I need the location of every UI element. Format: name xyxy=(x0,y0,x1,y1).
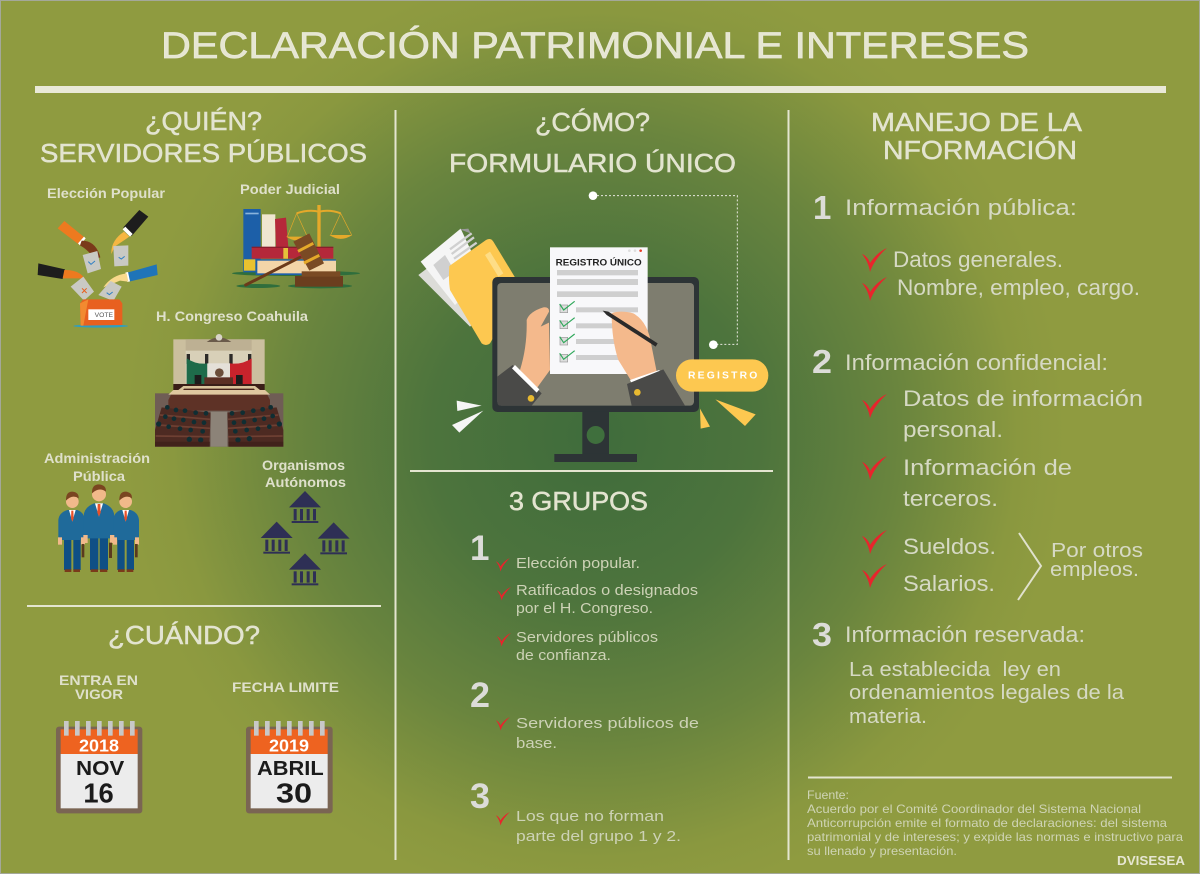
panel: cuándo xyxy=(56,620,339,813)
icon: hands voting xyxy=(38,210,158,328)
panel: manejo de la información xyxy=(807,107,1185,868)
panel: 3 grupos xyxy=(470,486,699,845)
label: entra en vigor: VIGOR xyxy=(75,686,123,702)
section 2: información confidencial: Salarios. xyxy=(903,571,995,596)
group 3: 3 xyxy=(470,777,490,816)
heading: cómo: FORMULARIO ÚNICO xyxy=(449,148,736,178)
heading: cómo xyxy=(449,107,736,178)
illustration: online registration on monitor xyxy=(418,191,768,462)
group 1 xyxy=(470,529,698,664)
group 1: Ratificados o designados xyxy=(516,582,698,599)
section 3: información reservada: materia. xyxy=(849,706,927,728)
label: entra en vigor xyxy=(59,672,138,702)
icon: calendar 2018 nov 16: 16 xyxy=(83,778,114,809)
heading: 3 grupos: 3 GRUPOS xyxy=(509,486,648,516)
section 1: información pública: Nombre, empleo, cargo. xyxy=(897,275,1140,300)
section 1: información pública: Información pública: xyxy=(845,195,1077,220)
credit: dvisesea: DVISESEA xyxy=(1117,854,1185,868)
group 2: base. xyxy=(516,735,557,752)
section 1: información pública xyxy=(813,189,1140,301)
icon: calendar 2018 nov 16: 2018 xyxy=(79,735,119,755)
icon: calendar 2019 abril 30: ABRIL xyxy=(257,757,324,780)
label: organismos autónomos xyxy=(262,457,346,490)
group 3: Los que no forman xyxy=(516,808,664,825)
group 1: 1 xyxy=(470,529,489,568)
source note: Anticorrupción emite el formato de declaraciones: del sistema xyxy=(807,816,1167,830)
section 2: información confidencial: terceros. xyxy=(903,486,998,511)
heading: manejo xyxy=(871,107,1083,165)
label: organismos autónomos: Autónomos xyxy=(265,474,346,490)
title: DECLARACIÓN PATRIMONIAL E INTERESES xyxy=(161,24,1029,66)
section 3: información reservada: La establecida ley en xyxy=(849,659,1061,681)
icon: hands voting: VOTE xyxy=(95,312,114,319)
illustration: online registration on monitor: REGISTRO ÚNICO xyxy=(556,256,642,267)
heading: quién: ¿QUIÉN? xyxy=(145,106,262,136)
heading: manejo: NFORMACIÓN xyxy=(883,135,1077,165)
heading: quién: SERVIDORES PÚBLICOS xyxy=(40,138,367,168)
group 3 xyxy=(470,777,681,845)
section 2: información confidencial: personal. xyxy=(903,417,1003,442)
group 1: Servidores públicos xyxy=(516,629,658,646)
label: administración pública: Administración xyxy=(44,450,150,466)
label: fecha limite: FECHA LIMITE xyxy=(232,679,339,695)
section 2: información confidencial: empleos. xyxy=(1050,559,1139,581)
label: poder judicial: Poder Judicial xyxy=(240,181,340,197)
section 1: información pública: Datos generales. xyxy=(893,247,1063,272)
section 2: información confidencial xyxy=(812,343,1143,600)
panel: cómo xyxy=(418,107,768,462)
icon: law books and gavel xyxy=(232,205,360,288)
heading: quién xyxy=(40,106,367,168)
label: organismos autónomos: Organismos xyxy=(262,457,345,473)
section 2: información confidencial: Sueldos. xyxy=(903,534,996,559)
heading: cuándo: ¿CUÁNDO? xyxy=(108,620,260,650)
section 2: información confidencial: Información confidencial: xyxy=(845,350,1108,375)
section 2: información confidencial: Datos de información xyxy=(903,386,1143,411)
icon: three officials xyxy=(58,484,139,572)
label: elección popular: Elección Popular xyxy=(47,185,166,201)
section 3: información reservada xyxy=(812,616,1125,728)
section 2: información confidencial: 2 xyxy=(812,343,832,380)
source note: su llenado y presentación. xyxy=(807,844,957,858)
group 1: de confianza. xyxy=(516,647,611,664)
icon: calendar 2019 abril 30 xyxy=(246,721,333,813)
group 3: parte del grupo 1 y 2. xyxy=(516,828,681,845)
group 1: por el H. Congreso. xyxy=(516,600,653,617)
icon: calendar 2018 nov 16: NOV xyxy=(76,757,125,780)
group 1: Elección popular. xyxy=(516,555,640,572)
illustration: congress chamber xyxy=(155,334,283,447)
section 3: información reservada: ordenamientos legales de la xyxy=(849,682,1125,704)
heading: cómo: ¿CÓMO? xyxy=(535,107,650,137)
label: administración pública: Pública xyxy=(73,468,125,484)
group 2: Servidores públicos de xyxy=(516,715,699,732)
section 1: información pública: 1 xyxy=(813,189,831,226)
illustration: online registration on monitor: REGISTRO xyxy=(688,371,757,382)
group 2 xyxy=(470,676,699,752)
section 3: información reservada: Información reservada: xyxy=(845,622,1085,647)
icon: calendar 2019 abril 30: 2019 xyxy=(269,735,309,755)
source note: Fuente: xyxy=(807,788,849,802)
section 2: información confidencial: Por otros xyxy=(1051,540,1143,562)
source note: patrimonial y de intereses; y expide las normas e instructivo para xyxy=(807,830,1183,844)
source note: Acuerdo por el Comité Coordinador del Sistema Nacional xyxy=(807,802,1141,816)
section 2: información confidencial: Información de xyxy=(903,455,1072,480)
heading: manejo: MANEJO DE LA xyxy=(871,107,1083,137)
group 2: 2 xyxy=(470,676,490,715)
source note xyxy=(807,788,1183,858)
icon: government buildings xyxy=(261,491,350,585)
label: h. congreso coahuila: H. Congreso Coahuila xyxy=(156,308,308,324)
panel: quién xyxy=(38,106,367,585)
icon: calendar 2018 nov 16 xyxy=(56,721,142,813)
icon: calendar 2019 abril 30: 30 xyxy=(276,778,312,809)
section 3: información reservada: 3 xyxy=(812,616,832,653)
label: entra en vigor: ENTRA EN xyxy=(59,672,138,688)
label: administración pública xyxy=(44,450,150,484)
